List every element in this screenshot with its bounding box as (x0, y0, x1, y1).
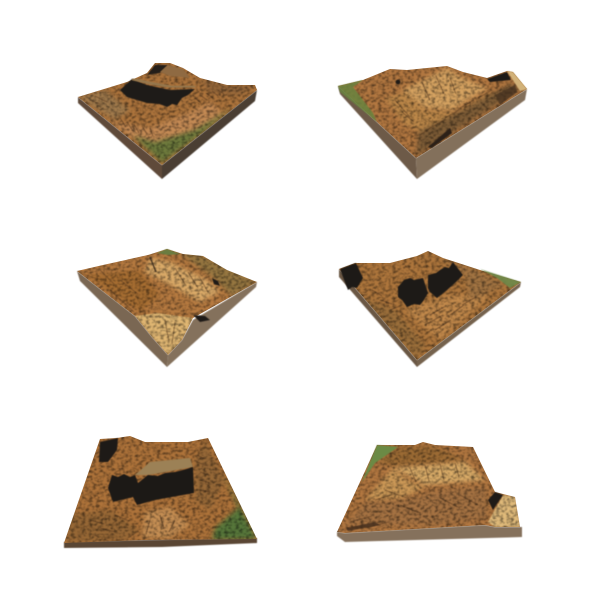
terrain surface (77, 249, 257, 355)
erosion ridges (350, 463, 478, 528)
pale ridge at right (507, 71, 527, 91)
terrain surface (337, 442, 520, 533)
terrain block 5: bottom left (60, 432, 260, 548)
mesa rim (132, 79, 195, 87)
side faces (339, 269, 521, 367)
figure: six terrain blocks (63, 63, 528, 548)
green patch at far corner (157, 249, 180, 255)
terrain block 2: top right (335, 60, 530, 179)
erosion ridges (90, 90, 224, 136)
terrain block 3: middle left (76, 248, 258, 368)
dark cliff shadows (120, 65, 195, 107)
front face (64, 538, 257, 548)
terrain surface (78, 63, 257, 165)
dark shadows (346, 492, 503, 531)
terrain surface (339, 251, 521, 360)
mesa top (135, 458, 193, 475)
front face (337, 525, 522, 542)
side faces (78, 90, 257, 179)
side faces (77, 271, 257, 367)
green corner (338, 80, 377, 122)
green corner (480, 269, 521, 288)
erosion ridges (80, 268, 208, 344)
dark cliffs (340, 262, 463, 307)
erosion ridges (372, 290, 476, 330)
dark shadows (396, 72, 517, 148)
terrain block 1: top left (77, 63, 258, 180)
dark cliffs (99, 438, 194, 505)
erosion ridges (90, 455, 210, 534)
terrain block 6: bottom right (332, 438, 524, 542)
dark shadows (150, 257, 220, 322)
erosion ridges (395, 76, 492, 135)
green strip (362, 445, 398, 482)
upper mesa slope (160, 65, 190, 78)
terrain block 4: middle right (335, 248, 525, 370)
terrain surface (60, 432, 260, 544)
side faces (338, 86, 527, 179)
terrain surface (338, 66, 527, 158)
